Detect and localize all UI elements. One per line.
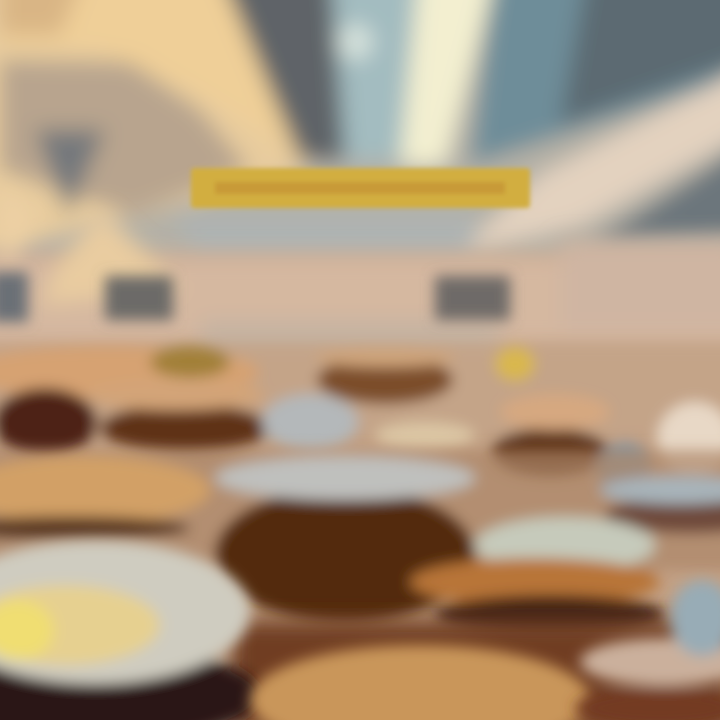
- table surface: [230, 620, 720, 720]
- golden round bread: [250, 645, 590, 720]
- bowls: front row: [0, 540, 720, 720]
- sky: rays and clouds: [0, 0, 720, 350]
- bowls: middle row: [0, 450, 720, 635]
- bowls: back row: [0, 345, 720, 498]
- right blue bowl: [575, 580, 720, 720]
- horizon band: [0, 185, 720, 350]
- large white bowl: [0, 540, 260, 720]
- dark windows on the horizon: [0, 272, 510, 322]
- banner: yellow title bar: [191, 168, 530, 208]
